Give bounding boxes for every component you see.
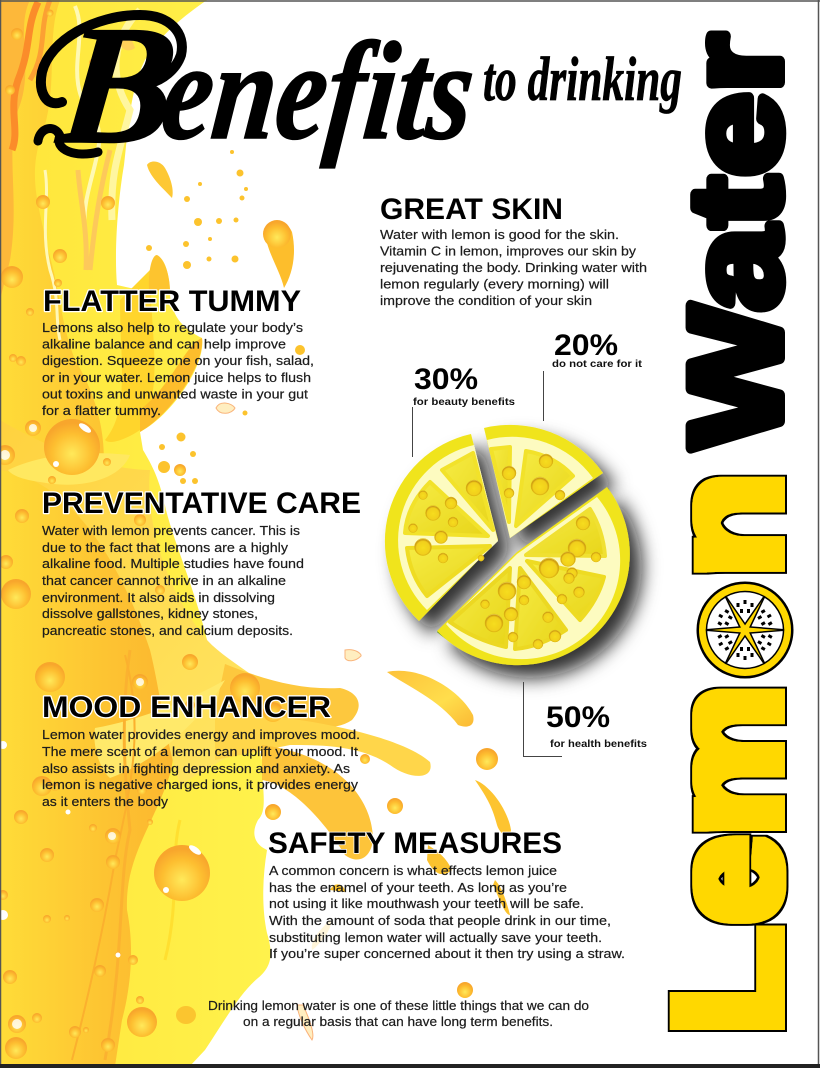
- heading: FLATTER TUMMY: [43, 285, 301, 318]
- body text: dissolve gallstones, kidney stones,: [42, 607, 258, 621]
- body text: not using it like mouthwash your teeth will be safe.: [269, 897, 584, 911]
- panel: flatter tummy: [42, 285, 314, 418]
- bubble highlights: [0, 422, 202, 1029]
- body text: substituting lemon water will actually save your teeth.: [269, 931, 602, 945]
- body text: digestion. Squeeze one on your fish, salad,: [42, 354, 314, 368]
- body text: due to the fact that lemons are a highly: [42, 541, 289, 555]
- body text: environment. It also aids in dissolving: [42, 591, 275, 605]
- title: Benefits to drinking: [38, 0, 682, 179]
- callout: 50% for health benefits: for health benefits: [550, 739, 647, 750]
- body text: [269, 864, 625, 961]
- body text: Lemon water provides energy and improves mood.: [42, 728, 360, 742]
- callout: 50% for health benefits: 50%: [546, 701, 610, 734]
- panel: great skin: [380, 193, 647, 308]
- bubbles on slice: [502, 454, 565, 500]
- body text: [42, 728, 360, 809]
- body text: alkaline balance and can help improve: [42, 338, 286, 352]
- body text: The mere scent of a lemon can uplift your mood. It: [42, 745, 359, 759]
- body text: With the amount of soda that people drink in our time,: [269, 914, 611, 928]
- pie slice: 20% no interest: [484, 425, 603, 538]
- title word: Benefits: [38, 0, 484, 179]
- body text: rejuvenating the body. Drinking water with: [380, 261, 647, 275]
- letter L: L: [643, 926, 811, 1036]
- body text: lemon regularly (every morning) will: [380, 278, 609, 292]
- juice fingers: [215, 664, 359, 728]
- closing text: on a regular basis that can have long term benefits.: [243, 1015, 553, 1029]
- letter n: n: [643, 472, 811, 578]
- callout: 50% for health benefits: [524, 682, 647, 756]
- body text: [380, 228, 647, 308]
- body text: improve the condition of your skin: [380, 294, 592, 308]
- bubbles on slice: [408, 480, 484, 563]
- bubbles on slice: [480, 516, 601, 649]
- heading: GREAT SKIN: [380, 193, 563, 226]
- juice drops on white: [146, 150, 511, 1040]
- word: Water: Water: [662, 34, 808, 448]
- panel: preventative care: [42, 487, 361, 638]
- title word: Benefits: enefits: [155, 14, 481, 169]
- heading: SAFETY MEASURES: [268, 827, 562, 860]
- title words: to drinking: to drinking: [483, 46, 682, 114]
- body text: has the enamel of your teeth. As long as you’re: [269, 881, 567, 895]
- callout: 30% for beauty benefits: for beauty benefits: [413, 397, 515, 408]
- body text: A common concern is what effects lemon juice: [269, 864, 557, 878]
- body text: Water with lemon is good for the skin.: [380, 228, 619, 242]
- body text: as it enters the body: [42, 795, 169, 809]
- body text: also assists in fighting depression and anxiety. As: [42, 762, 350, 776]
- body text: If you’re super concerned about it then try using a straw.: [269, 947, 625, 961]
- closing text: Drinking lemon water is one of these little things that we can do: [208, 999, 589, 1013]
- bubbles on juice: [0, 10, 283, 1059]
- callout: 30% for beauty benefits: [412, 363, 515, 457]
- body text: or in your water. Lemon juice helps to flush: [42, 371, 311, 385]
- body text: alkaline food. Multiple studies have found: [42, 557, 304, 571]
- callout: 30% for beauty benefits: 30%: [414, 363, 478, 396]
- callout: 20% do not care for it: do not care for it: [552, 359, 643, 370]
- body text: pancreatic stones, and calcium deposits.: [42, 624, 293, 638]
- letter m: m: [643, 684, 811, 837]
- body text: Lemons also help to regulate your body’s: [42, 321, 303, 335]
- body text: that cancer cannot thrive in an alkaline: [42, 574, 286, 588]
- body text: for a flatter tummy.: [42, 404, 161, 418]
- heading: PREVENTATIVE CARE: [42, 487, 361, 520]
- body text: [42, 321, 314, 418]
- pie slice: 30% beauty benefits: [385, 434, 498, 621]
- juice splash background: [0, 0, 431, 1066]
- body text: Water with lemon prevents cancer. This is: [42, 524, 300, 538]
- word: Lemon letters: [643, 472, 811, 1036]
- body text: lemon is negative charged ions, it provides energy: [42, 778, 359, 792]
- body text: Vitamin C in lemon, improves our skin by: [380, 244, 637, 258]
- heading: MOOD ENHANCER: [42, 691, 331, 724]
- body text: out toxins and unwanted waste in your gut: [42, 388, 309, 402]
- panel: mood enhancer: [42, 691, 360, 809]
- letter e: e: [643, 836, 811, 924]
- panel: safety measures: [268, 827, 625, 961]
- body text: [42, 524, 304, 638]
- callout: 20% do not care for it: 20%: [554, 329, 618, 362]
- pie slice: 50% health benefits: [437, 487, 630, 665]
- closing text: [208, 999, 589, 1029]
- chart: lemon slice pie: [385, 425, 630, 665]
- vertical title: Lemon Water: [643, 34, 811, 1036]
- icon: lemon slice letter o: [696, 582, 794, 678]
- callout: 20% do not care for it: [544, 329, 643, 421]
